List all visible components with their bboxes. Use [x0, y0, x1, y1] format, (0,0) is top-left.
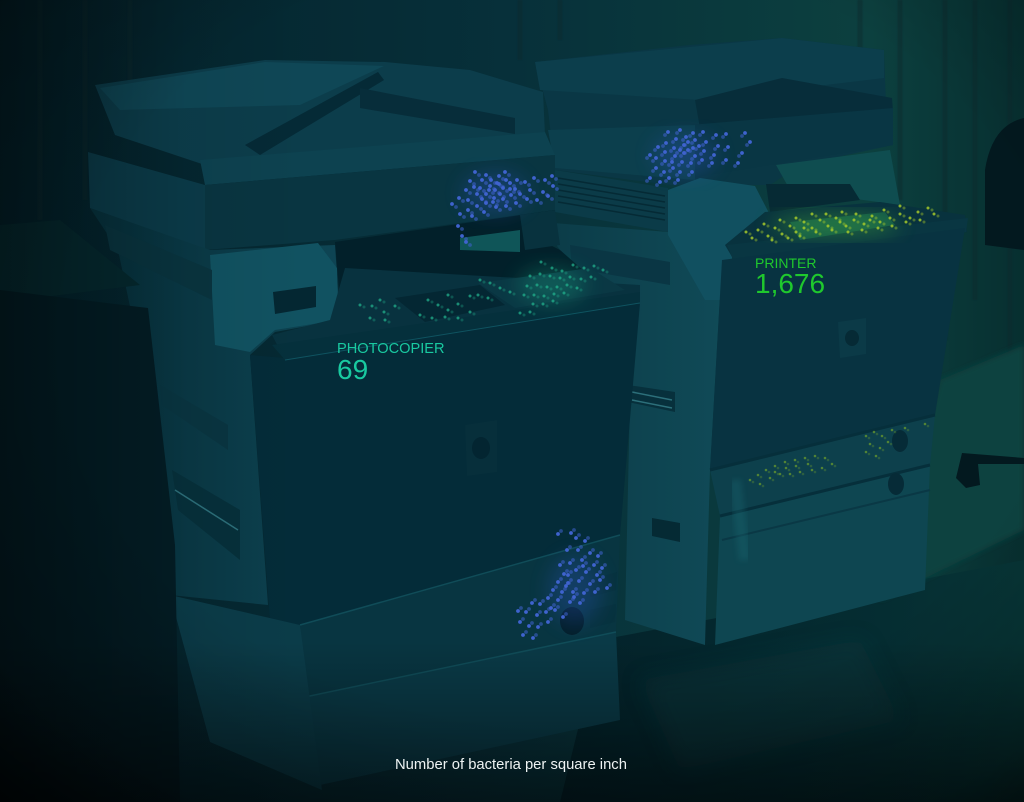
bacteria: printer lid cluster (blue) — [647, 130, 750, 185]
printer heading: PRINTER — [755, 255, 816, 271]
bacteria: photocopier panel cluster (green) — [360, 262, 607, 322]
floor — [560, 560, 1024, 802]
bacteria: printer panel cluster (yellow-green) — [746, 206, 938, 242]
bacteria: photocopier lid cluster (blue) — [452, 172, 557, 245]
label: printer — [755, 255, 825, 299]
printer value: 1,676 — [755, 268, 825, 299]
photocopier value: 69 — [337, 354, 368, 385]
photocopier heading: PHOTOCOPIER — [337, 341, 445, 357]
caption: Number of bacteria per square inch — [395, 757, 627, 773]
bacteria: photocopier drawer cluster (blue) — [518, 530, 610, 638]
left printer — [88, 60, 640, 790]
dark cabinet at far left — [0, 220, 180, 802]
right printer — [535, 38, 968, 645]
label: photocopier — [337, 341, 445, 385]
wall stripes — [40, 0, 1010, 360]
bacteria: printer drawer clusters (yellow-green) — [750, 424, 928, 486]
right dark chair and cable — [956, 118, 1024, 488]
